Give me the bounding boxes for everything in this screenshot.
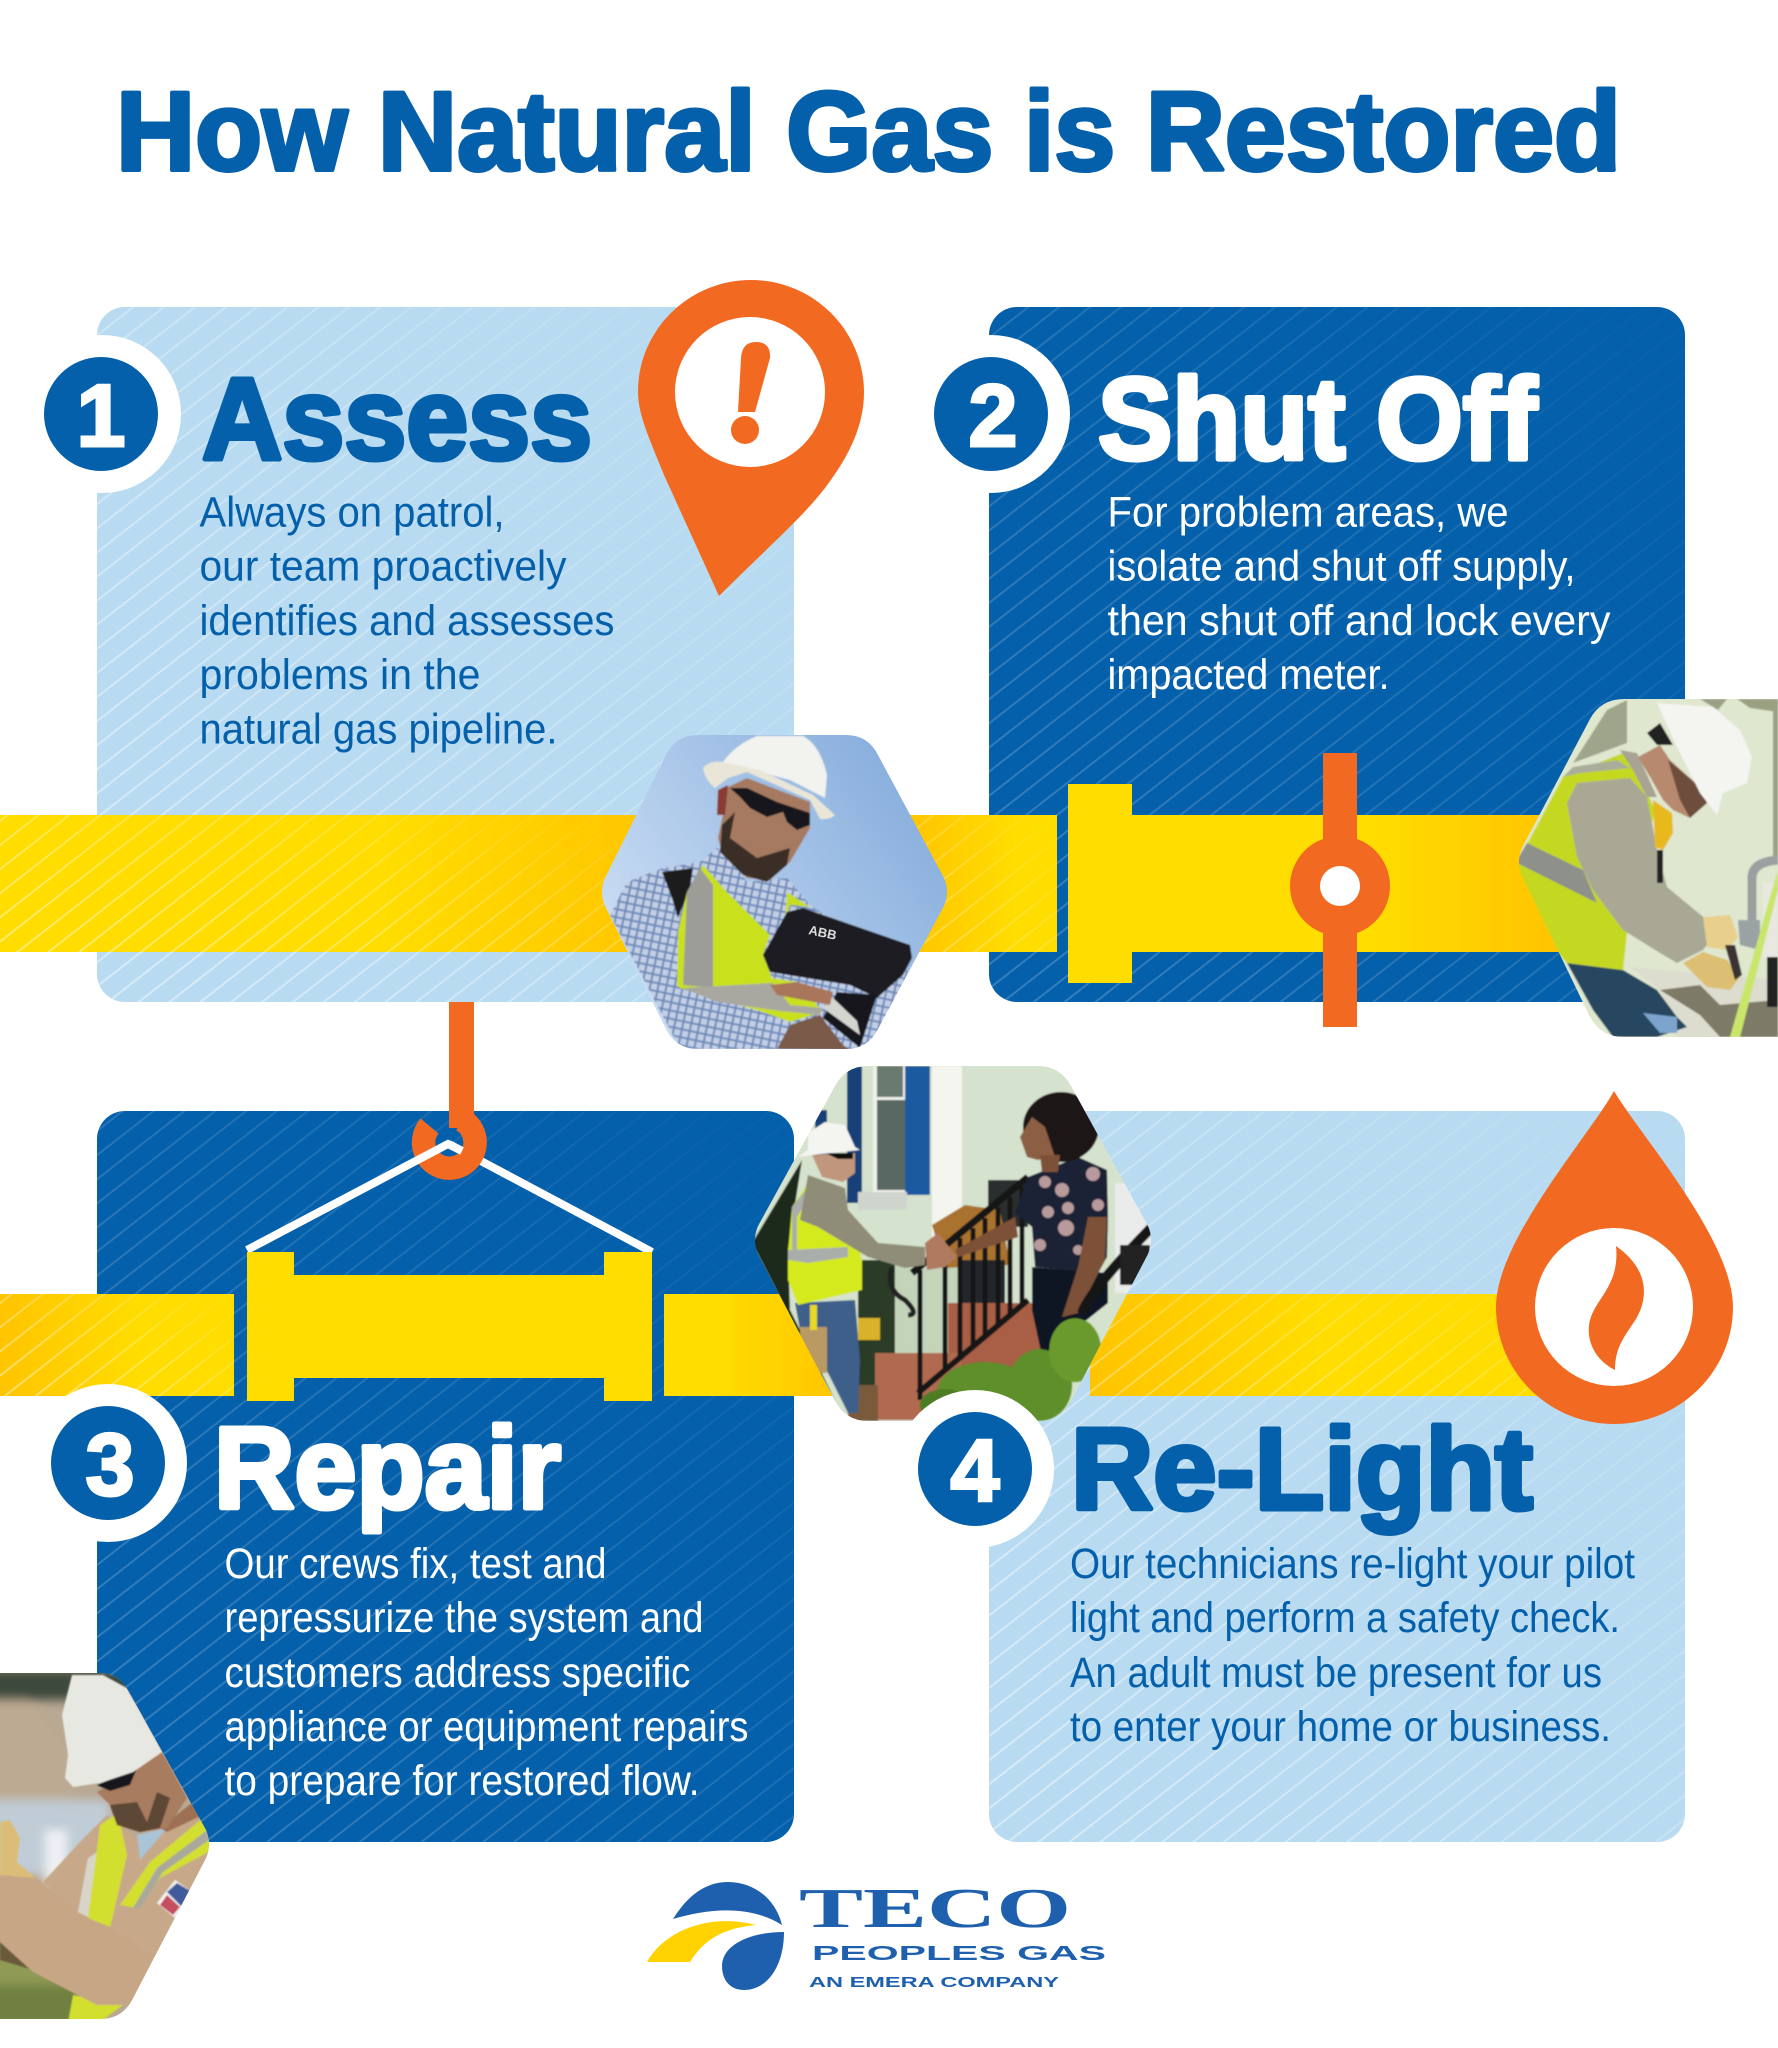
- badge: number 1: [23, 335, 181, 493]
- photo: worker at gas meter: [1510, 695, 1778, 1040]
- panel: step 4 re-light: [989, 1111, 1685, 1842]
- text: assess description: problems in the: [200, 651, 480, 699]
- text: re-light description: light and perform a safety check.: [1070, 1594, 1620, 1642]
- text: repair description: to prepare for restored flow.: [224, 1757, 700, 1805]
- panel: step 1 assess: [97, 307, 794, 1002]
- text: repair description: Our crews fix, test and: [224, 1540, 606, 1588]
- logo mark: [647, 1882, 784, 1990]
- heading: shut off: Shut Off: [1098, 354, 1537, 484]
- icon: crane hook lifting pipe section: [247, 1002, 652, 1401]
- badge: number 4: [896, 1390, 1054, 1548]
- photo: worker with handheld detector: [595, 730, 955, 1055]
- text: assess description: natural gas pipeline.: [200, 706, 558, 754]
- text: repair description: repressurize the system and: [224, 1594, 704, 1642]
- text: shut off description: For problem areas, we: [1108, 488, 1508, 536]
- text: re-light description: An adult must be present for us: [1070, 1649, 1602, 1697]
- badge: number 1: 1: [77, 366, 125, 465]
- text: re-light description: to enter your home or business.: [1070, 1703, 1611, 1751]
- heading: re-light: Re-Light: [1071, 1404, 1533, 1534]
- logo: TECO Peoples Gas: AN EMERA COMPANY: [809, 1974, 1059, 1991]
- panel: step 3 repair: [97, 1111, 794, 1842]
- bottom pipeline: [0, 1294, 1620, 1396]
- text: re-light description: Our technicians re-light your pilot: [1070, 1540, 1635, 1588]
- text: shut off description: then shut off and lock every: [1108, 597, 1611, 645]
- text: shut off description: impacted meter.: [1108, 651, 1390, 699]
- icon: gas flame drop: [1496, 1091, 1733, 1424]
- icon: shut-off valve: [1290, 753, 1390, 1027]
- badge: number 2: [912, 335, 1070, 493]
- logo: TECO Peoples Gas: PEOPLES GAS: [812, 1943, 1106, 1965]
- text: repair description: [224, 1540, 748, 1805]
- text: assess description: our team proactively: [200, 542, 567, 590]
- panel: step 2 shut off: [989, 307, 1685, 1002]
- text: assess description: [200, 488, 614, 754]
- badge: number 2: 2: [969, 366, 1017, 465]
- badge: number 4: 4: [951, 1421, 1000, 1520]
- text: repair description: customers address specific: [224, 1649, 690, 1697]
- text: shut off description: isolate and shut off supply,: [1108, 542, 1576, 590]
- text: assess description: Always on patrol,: [200, 488, 504, 536]
- icon: location pin with exclamation mark: [638, 280, 864, 596]
- title: How Natural Gas is Restored: [116, 69, 1621, 194]
- text: shut off description: [1108, 488, 1611, 699]
- top pipeline: [0, 784, 1570, 983]
- photo: technician greeting customer at home: [750, 1060, 1160, 1425]
- photo: worker with handheld detector: ABB: [807, 922, 838, 943]
- heading: repair: Repair: [214, 1403, 561, 1533]
- text: repair description: appliance or equipment repairs: [224, 1703, 748, 1751]
- photo: crew member with hard hat: [0, 1670, 215, 2030]
- text: assess description: identifies and assesses: [200, 597, 614, 645]
- heading: assess: Assess: [202, 354, 592, 484]
- badge: number 3: [29, 1384, 187, 1542]
- badge: number 3: 3: [86, 1415, 134, 1514]
- logo: TECO Peoples Gas: [647, 1878, 1106, 1991]
- logo wordmark: TECO: [799, 1878, 1071, 1940]
- text: re-light description: [1070, 1540, 1635, 1751]
